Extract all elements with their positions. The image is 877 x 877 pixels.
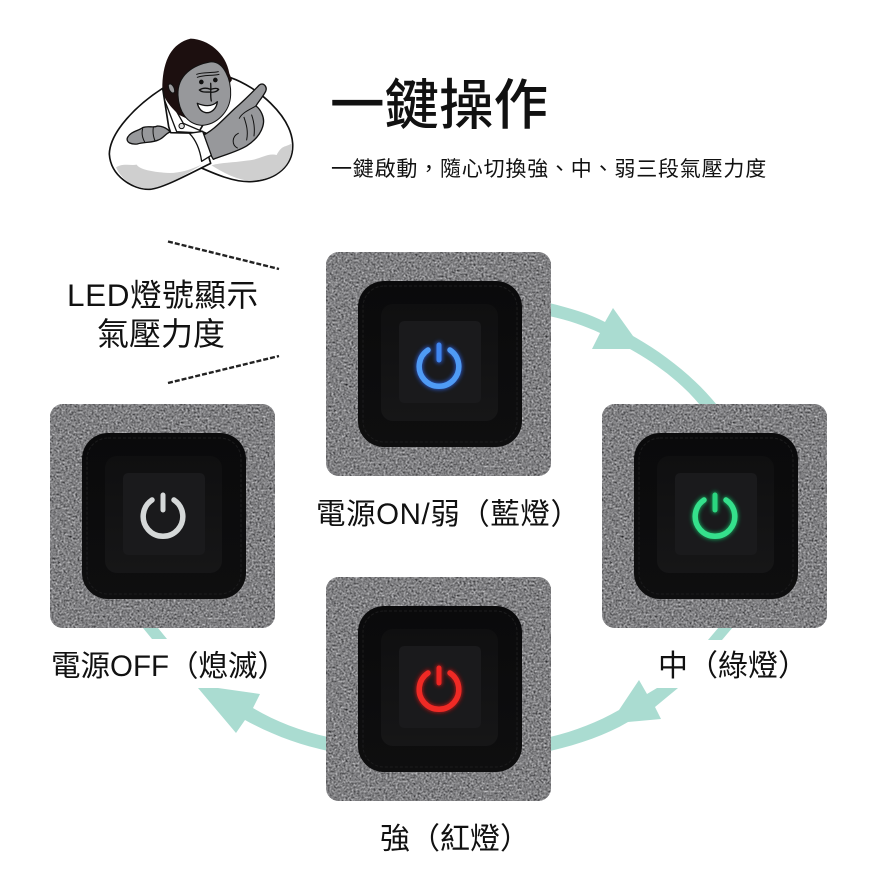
label: medium: 中（綠燈） — [658, 650, 808, 683]
arrow: red to off — [198, 688, 328, 751]
icon: green power symbol — [695, 495, 735, 536]
subtitle: 一鍵啟動，隨心切換強、中、弱三段氣壓力度 — [331, 158, 767, 181]
arrow: blue to green — [549, 303, 717, 405]
panel: off state — [50, 404, 275, 628]
title: 一鍵操作 — [330, 75, 548, 136]
back sleeve — [200, 78, 293, 182]
panel: strong, red light — [326, 577, 551, 801]
resting hand — [127, 126, 170, 144]
callout bracket: upper dashed line — [168, 242, 279, 269]
callout text: 氣壓力度 — [97, 316, 225, 352]
icon: white power symbol — [143, 495, 183, 536]
mascot illustration — [109, 39, 293, 189]
arrow: green to red — [708, 627, 733, 640]
button — [179, 123, 184, 129]
front sleeve — [109, 88, 211, 189]
label: off: 電源OFF（熄滅） — [51, 650, 287, 683]
label: strong: 強（紅燈） — [380, 823, 530, 856]
ear — [168, 84, 175, 93]
callout bracket: lower dashed line — [168, 356, 279, 383]
panel: medium, green light — [602, 404, 827, 628]
callout text — [67, 277, 258, 352]
hair — [162, 39, 232, 125]
cuff — [189, 131, 211, 161]
collar and neck — [161, 88, 207, 133]
icon: red power symbol — [419, 668, 459, 709]
cycle arrows — [143, 303, 733, 751]
label: power on: 電源ON/弱（藍燈） — [316, 498, 580, 531]
icon: blue power symbol — [419, 345, 459, 386]
pointing hand — [200, 84, 266, 159]
face — [178, 62, 231, 125]
panel: power on, blue light — [326, 252, 551, 476]
callout text: LED燈號顯示 — [67, 277, 258, 313]
